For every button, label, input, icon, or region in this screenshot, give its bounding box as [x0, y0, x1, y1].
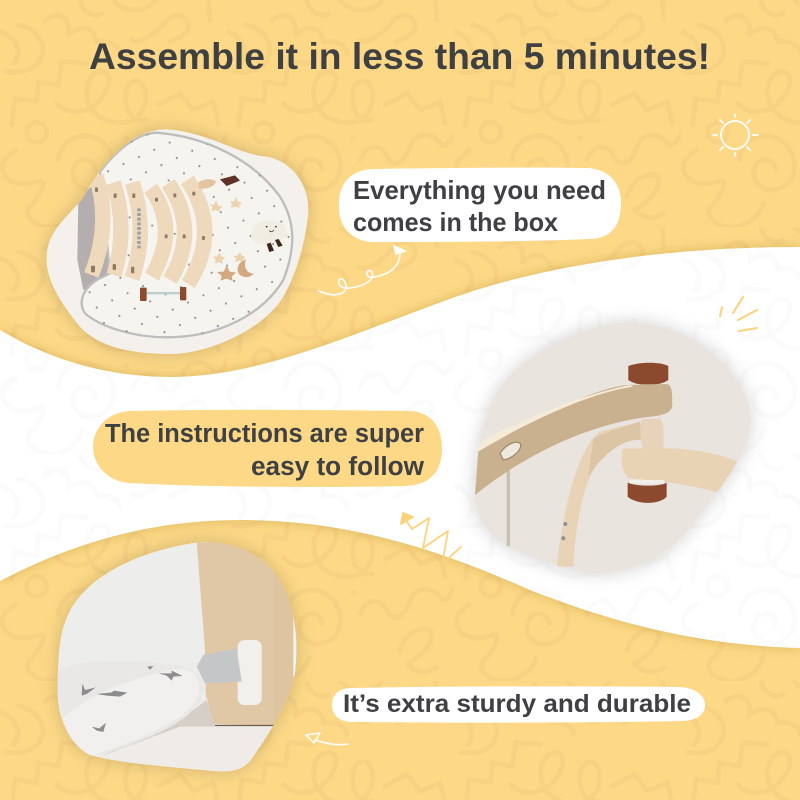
bolts	[563, 522, 567, 526]
quilted mat	[82, 133, 292, 337]
arrow: yellow zigzag	[401, 513, 461, 564]
strap slot	[238, 640, 262, 705]
cloud toy	[251, 221, 287, 244]
photo: strap through wooden arch	[53, 537, 307, 780]
small block	[640, 418, 664, 451]
vertical arch	[557, 422, 642, 567]
arch slots	[91, 187, 205, 273]
chocolate toy	[220, 175, 240, 186]
photo: all parts laid out on the mat	[33, 120, 320, 363]
callout: instructions: easy to follow	[251, 453, 424, 481]
arrow: small white arrow	[306, 733, 348, 745]
lower arch	[622, 448, 737, 493]
mat stars	[82, 666, 183, 732]
strap	[197, 648, 242, 683]
dowel with caps	[145, 292, 182, 294]
arrow: white looped arrow	[319, 246, 405, 295]
floor	[100, 697, 277, 775]
wooden board	[197, 542, 303, 727]
callout: sturdy and durable: It’s extra sturdy and durable	[343, 690, 691, 718]
title: Assemble it in less than 5 minutes!	[89, 36, 710, 77]
callout: everything you need: Everything you need	[353, 175, 606, 205]
horizontal beam	[475, 384, 672, 495]
string	[506, 470, 510, 547]
callout: everything you need	[339, 168, 621, 242]
grey fold of the mat	[77, 186, 108, 290]
mat	[58, 673, 191, 756]
callout: everything you need: comes in the box	[353, 207, 559, 237]
wooden toy	[198, 179, 216, 189]
callout: sturdy and durable	[332, 686, 705, 723]
white wave band	[0, 247, 800, 648]
bottom felt cap	[630, 480, 664, 483]
top felt cap	[628, 363, 668, 385]
wooden arches	[91, 176, 205, 284]
stars and moon	[210, 197, 246, 264]
screws	[137, 208, 141, 248]
beam slot	[500, 442, 521, 460]
callout: instructions: The instructions are super	[105, 420, 424, 448]
icon: sun	[713, 114, 758, 156]
icon: yellow burst lines	[720, 297, 757, 331]
callout: instructions	[93, 410, 442, 487]
photo: arch joint close-up	[470, 317, 757, 580]
